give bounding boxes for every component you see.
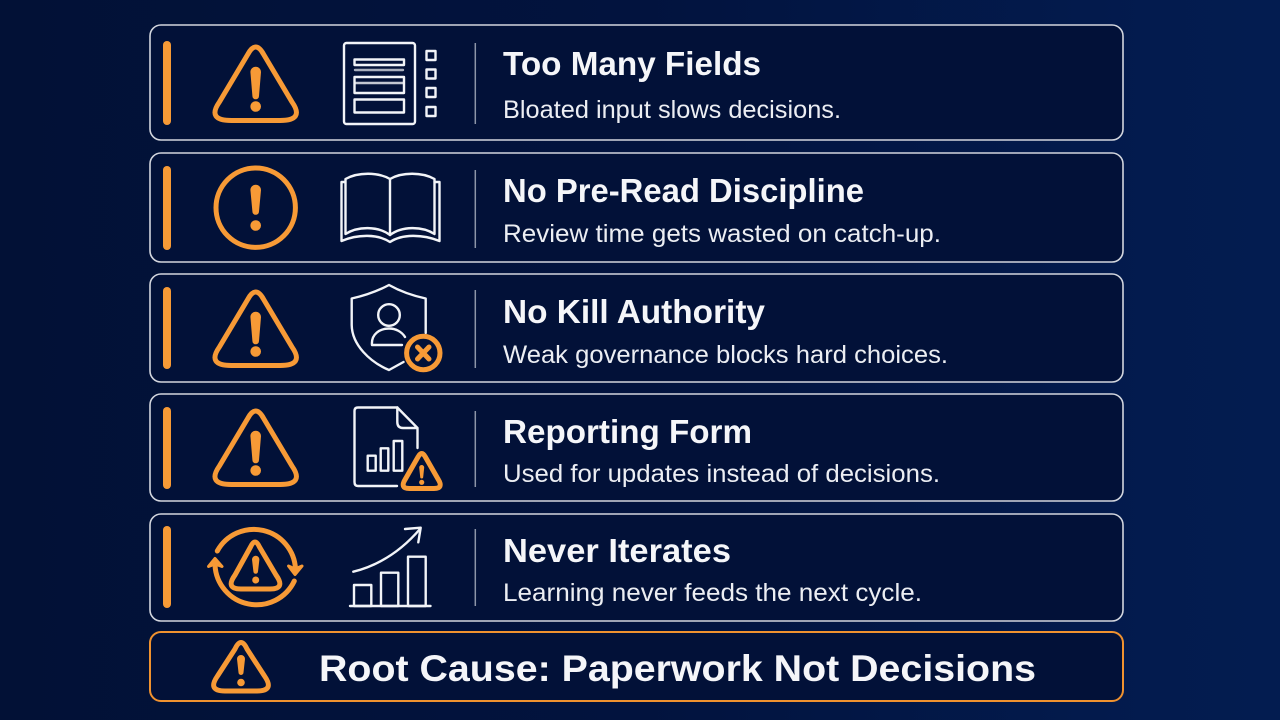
icon: warning triangle [215, 292, 296, 366]
icon: warning triangle [215, 47, 296, 120]
heading: Reporting Form [503, 414, 752, 451]
description: Weak governance blocks hard choices. [503, 341, 948, 369]
icon: open book [342, 174, 440, 242]
description: Review time gets wasted on catch-up. [503, 220, 941, 248]
description: Learning never feeds the next cycle. [503, 579, 922, 607]
heading: Never Iterates [503, 533, 731, 570]
icon: warning triangle [214, 642, 268, 691]
panel: reporting form [150, 394, 1123, 501]
icon: warning triangle [215, 411, 296, 484]
icon: form with fields [344, 43, 436, 124]
icon: report document with alert [354, 408, 440, 488]
panel: never iterates [150, 514, 1123, 621]
heading: No Pre-Read Discipline [503, 173, 864, 210]
panel: no kill authority [150, 274, 1123, 382]
description: Bloated input slows decisions. [503, 96, 841, 124]
icon: cycle arrows with warning [208, 529, 302, 605]
callout: root cause [150, 632, 1123, 701]
heading: No Kill Authority [503, 294, 765, 331]
heading: Too Many Fields [503, 46, 761, 83]
panel: too many fields [150, 25, 1123, 140]
icon: shield with person and x [352, 285, 440, 370]
panel: no pre-read discipline [150, 153, 1123, 262]
description: Used for updates instead of decisions. [503, 460, 940, 488]
icon: warning circle [216, 168, 295, 247]
icon: rising bar chart [350, 528, 430, 606]
heading: root cause statement: Root Cause: Paperwork Not Decisions [319, 648, 1036, 689]
